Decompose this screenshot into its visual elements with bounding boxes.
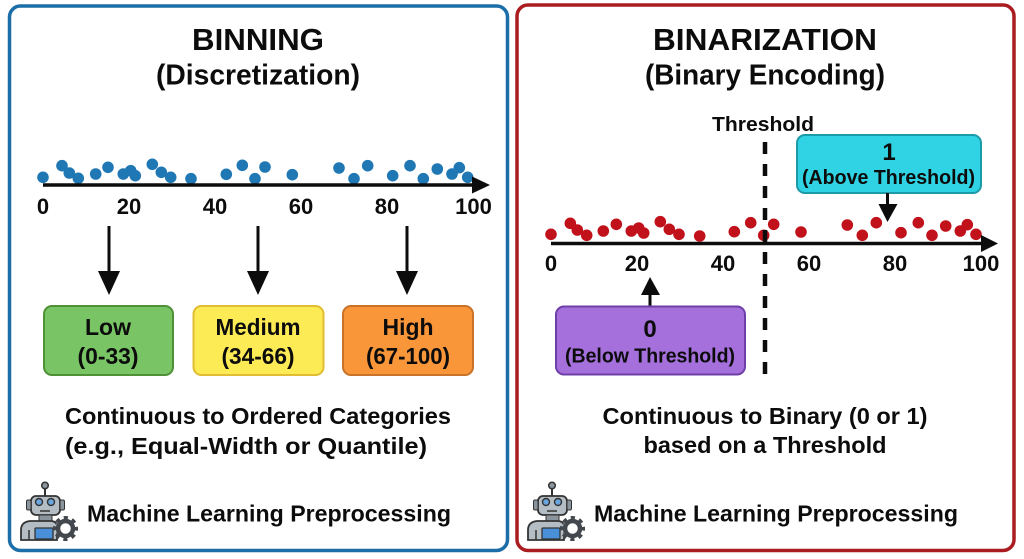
heading: binarization: (Binary Encoding) xyxy=(645,60,885,92)
text: binarization description xyxy=(602,403,928,458)
box: below threshold: (Below Threshold) xyxy=(565,346,735,368)
icon: robot with gear xyxy=(528,482,583,540)
text: binning description: Continuous to Ordered Categories xyxy=(65,403,451,429)
number line: binarization data points: 60 xyxy=(797,251,821,276)
heading: binning: (Discretization) xyxy=(156,60,360,92)
heading: binarization xyxy=(645,22,885,92)
arrow: to Low xyxy=(98,226,120,295)
number line: binarization data points: 100 xyxy=(963,251,999,276)
text: binning description xyxy=(65,403,451,459)
box: High xyxy=(343,306,473,375)
panel: binarization xyxy=(517,5,1014,550)
number line: binarization data points xyxy=(545,216,999,276)
arrow: below threshold xyxy=(641,277,660,306)
text: binarization description: based on a Threshold xyxy=(644,432,886,458)
text: footer binning: Machine Learning Preprocessing xyxy=(87,500,451,526)
box: above threshold: (Above Threshold) xyxy=(802,167,975,189)
box: below threshold xyxy=(556,306,745,374)
box: Medium: (34-66) xyxy=(222,343,294,369)
number line: binarization data points: 20 xyxy=(625,251,649,276)
number line: binning data points: 60 xyxy=(289,194,313,219)
text: binning description: (e.g., Equal-Width or Quantile) xyxy=(65,433,427,459)
arrow: above threshold xyxy=(878,193,898,222)
arrow: to High xyxy=(396,226,418,295)
heading: binarization: BINARIZATION xyxy=(653,22,877,57)
heading: binning: BINNING xyxy=(192,22,324,57)
box: Medium: Medium xyxy=(216,314,300,340)
text: footer binarization: Machine Learning Preprocessing xyxy=(594,500,958,526)
box: Medium xyxy=(194,306,324,375)
box: Low xyxy=(44,306,173,375)
icon: robot with gear xyxy=(21,482,76,540)
box: Low: (0-33) xyxy=(78,343,138,369)
text: binarization description: Continuous to Binary (0 or 1) xyxy=(602,403,928,429)
label: threshold: Threshold xyxy=(712,113,814,136)
box: above threshold: 1 xyxy=(882,139,896,166)
box: High: High xyxy=(382,314,434,340)
number line: binning data points xyxy=(37,158,492,219)
box: High: (67-100) xyxy=(366,343,450,369)
number line: binarization data points: 0 xyxy=(545,251,557,276)
number line: binarization data points: 40 xyxy=(711,251,735,276)
threshold dashed line xyxy=(763,142,767,374)
heading: binning xyxy=(156,22,360,92)
box: above threshold xyxy=(797,135,981,193)
panel: binning xyxy=(10,6,508,550)
arrow: to Medium xyxy=(247,226,269,295)
box: below threshold: 0 xyxy=(643,316,657,343)
number line: binarization data points: 80 xyxy=(883,251,907,276)
box: Low: Low xyxy=(85,314,131,340)
number line: binning data points: 0 xyxy=(37,194,49,219)
number line: binning data points: 100 xyxy=(455,194,492,219)
number line: binning data points: 40 xyxy=(203,194,227,219)
number line: binning data points: 80 xyxy=(375,194,399,219)
number line: binning data points: 20 xyxy=(117,194,141,219)
